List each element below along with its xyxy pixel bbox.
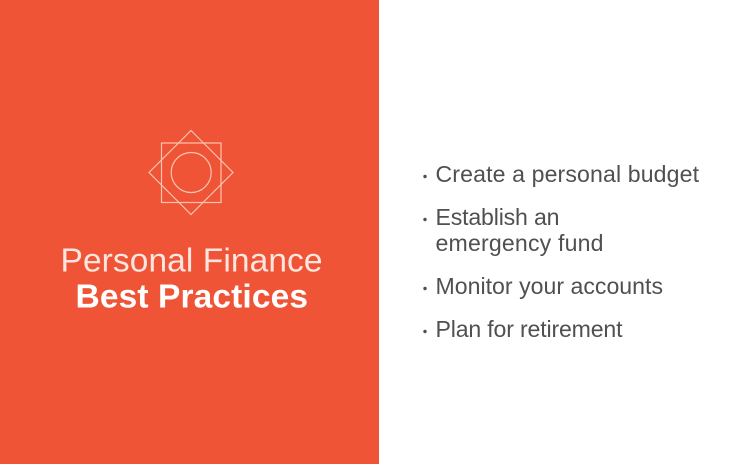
list item: create a budget: Create a personal budget	[436, 161, 700, 187]
panel: orange title panel	[0, 0, 379, 464]
heading: title: Best Practices	[76, 278, 308, 316]
icon: square, diamond and circle emblem	[149, 130, 233, 214]
list item: emergency fund: Establish an	[436, 204, 560, 230]
list item: plan for retirement: Plan for retirement	[436, 316, 623, 342]
list item: monitor accounts: Monitor your accounts	[436, 273, 663, 299]
list item: emergency fund	[423, 204, 604, 256]
list item: emergency fund: emergency fund	[436, 230, 604, 256]
text block: best practices list	[423, 161, 700, 342]
heading: title	[60, 242, 322, 316]
heading: title: Personal Finance	[60, 242, 322, 280]
